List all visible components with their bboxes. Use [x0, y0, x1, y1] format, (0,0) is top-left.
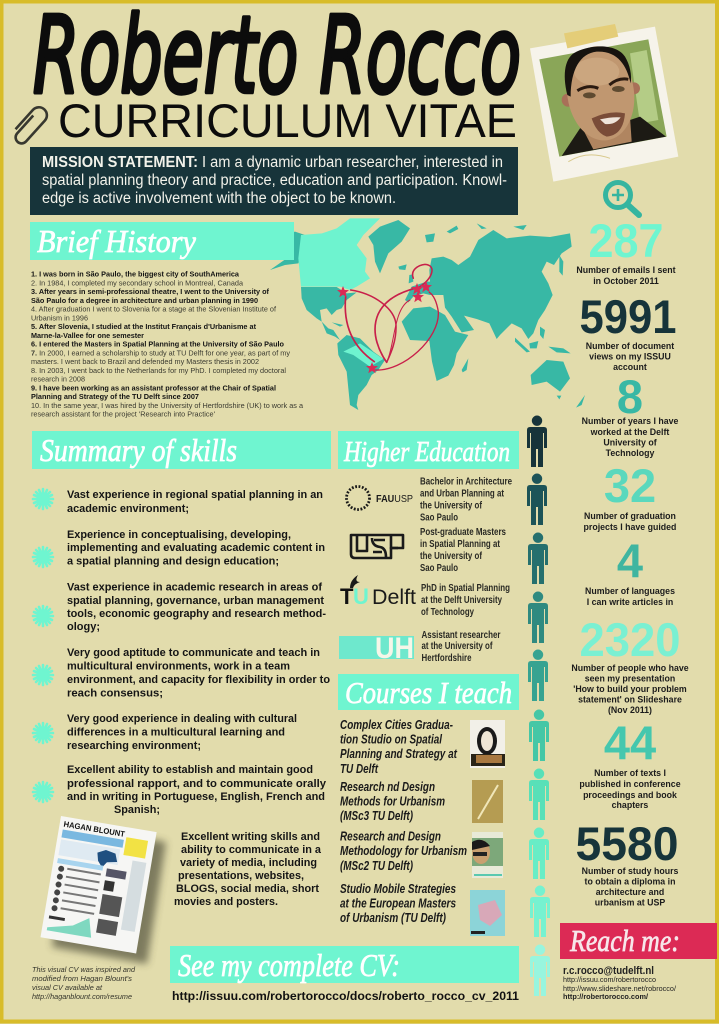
logo: TU Delft: T — [340, 584, 354, 609]
stat: 2320 views: statement' on Slideshare — [578, 694, 682, 704]
icon: paperclip — [10, 104, 50, 146]
writing skills text: movies and posters. — [174, 896, 278, 908]
course 2 — [340, 780, 445, 823]
credit note — [32, 965, 136, 1001]
skills list: Very good aptitude to communicate and teach in — [67, 647, 320, 659]
course 4: of Urbanism (TU Delft) — [340, 911, 446, 925]
stat: 5991 views: Number of document — [586, 341, 674, 351]
contact details: http://issuu.com/robertorocco — [563, 977, 656, 984]
brief history list: Marne-la-Vallee for one semester — [31, 331, 144, 340]
panel: brief history heading — [30, 222, 294, 260]
panel: higher education heading: Higher Education — [343, 436, 510, 468]
stat: 2320 views: (Nov 2011) — [608, 705, 652, 715]
logo: University of Hertfordshire — [339, 632, 414, 665]
subtitle: Curriculum Vitae: CURRICULUM VITAE — [58, 95, 517, 148]
course 3 thumbnail — [472, 832, 503, 878]
education: bachelor: the University of — [420, 500, 482, 512]
map: highlighted Canada and Brazil — [298, 218, 383, 367]
stat: 44 texts: published in conference — [579, 779, 681, 789]
mission statement panel: MISSION STATEMENT: I am a dynamic urban researcher, interested in — [42, 154, 503, 171]
stat: 4 languages — [585, 534, 675, 607]
course 4: at the European Masters — [340, 896, 456, 910]
stat: 4 languages: 4 — [617, 534, 643, 587]
writing skills text: presentations, websites, — [178, 870, 304, 882]
education: assistant researcher: Hertfordshire — [422, 652, 472, 664]
stat: 2320 views: 2320 — [580, 613, 680, 666]
logo: USP — [351, 535, 403, 558]
education: PhD — [421, 582, 510, 618]
brief history list: Planning and Strategy of the TU Delft since 2007 — [31, 392, 199, 401]
skills list: ology; — [67, 621, 100, 633]
skills list: tools, economic geography and research method- — [67, 608, 326, 620]
course 1: Complex Cities Gradua- — [340, 718, 453, 732]
panel: courses heading: Courses I teach — [345, 675, 512, 710]
stat: 5580 hours: to obtain a diploma in — [585, 876, 675, 886]
stat: 5580 hours: Number of study hours — [582, 866, 678, 876]
skills list: academic environment; — [67, 503, 189, 515]
stat: 5991 views: account — [613, 362, 647, 372]
stat: 2320 views: seen my presentation — [585, 674, 675, 684]
brief history list: 5. After Slovenia, I studied at the Institut Français d'Urbanisme at — [31, 322, 256, 331]
course 3: Methodology for Urbanism — [340, 844, 467, 858]
course 4: Studio Mobile Strategies — [340, 882, 456, 896]
course 1 — [340, 718, 458, 776]
stat: 4 languages: Number of languages — [585, 586, 675, 596]
stat: 32 projects: 32 — [604, 459, 656, 512]
education: bachelor — [420, 476, 512, 524]
contact details — [563, 965, 676, 1001]
course 2: Research nd Design — [340, 780, 435, 794]
skills list: differences in a multicultural learning and — [67, 726, 285, 738]
education: PhD: of Technology — [421, 606, 474, 618]
skills list — [67, 489, 330, 816]
map: travel routes — [345, 264, 438, 370]
course 4 — [340, 882, 456, 925]
stat: 287 emails: Number of emails I sent — [576, 265, 676, 275]
skills list: Vast experience in academic research in areas of — [67, 582, 322, 594]
stat: 5991 views: 5991 — [580, 290, 676, 343]
stat: 44 texts: chapters — [612, 800, 648, 810]
brief history list: masters. I went back to Brazil and defended my Masters thesis in 2002 — [31, 357, 259, 366]
education: bachelor: Bachelor in Architecture — [420, 476, 512, 488]
brief history list: Urbanism in 1996 — [31, 313, 88, 322]
brief history list: 4. After graduation I went to Slovenia for a stage at the Slovenian Institute of — [31, 304, 277, 314]
education: masters: the University of — [420, 550, 482, 562]
writing skills text: ability to communicate in a — [181, 844, 322, 856]
credit note: visual CV available at — [32, 983, 103, 992]
stat: 5991 views: views on my ISSUU — [589, 352, 671, 362]
brief history list: 2. In 1984, I completed my secondary school in Montreal, Canada — [31, 278, 244, 287]
course 2 thumbnail — [472, 780, 503, 823]
brief history list — [31, 270, 304, 418]
icon: magnifier — [606, 182, 639, 215]
skills list: professional rapport, and to communicate orally — [67, 778, 327, 790]
stat: 8 years: worked at the Delft — [590, 427, 669, 437]
brief history list: research assistant for the project 'Research into Practice' — [31, 410, 216, 418]
world map — [270, 218, 585, 410]
mission statement panel — [30, 147, 518, 215]
education: masters: Post-graduate Masters — [420, 526, 506, 538]
map: city stars — [337, 281, 432, 373]
stat: 287 emails — [576, 214, 676, 286]
mission statement panel: edge is active involvement with the object to be known. — [42, 190, 396, 207]
logo: TU Delft — [340, 575, 416, 609]
skills list: implementing and evaluating academic content in — [67, 542, 325, 554]
education: masters — [420, 526, 506, 574]
writing skills text: Excellent writing skills and — [181, 831, 320, 843]
brief history list: 1. I was born in São Paulo, the biggest city of SouthAmerica — [31, 270, 240, 278]
credit note: modified from Hagan Blount's — [32, 974, 132, 983]
map: land masses — [270, 220, 585, 410]
course 1: tion Studio on Spatial — [340, 732, 442, 746]
logo: FAU USP: FAUUSP — [376, 494, 413, 505]
panel: see my complete CV: See my complete CV: — [178, 947, 400, 983]
stat: 2320 views: 'How to build your problem — [573, 684, 687, 694]
stat: 8 years: University of — [603, 438, 657, 448]
poster thumbnail: Hagan Blount visual CV: HAGAN BLOUNT — [63, 820, 126, 839]
credit note: http://haganblount.com/resume — [32, 992, 132, 1001]
stat: 5580 hours: urbanism at USP — [595, 898, 665, 908]
brief history list: 9. I have been working as an assistant professor at the Chair of Spatial — [31, 383, 276, 392]
skills list: environment, and capacity for flexibility in order to — [67, 674, 330, 686]
stat: 44 texts: Number of texts I — [594, 768, 666, 778]
course 1: Planning and Strategy at — [340, 747, 458, 761]
education: assistant researcher: at the University of — [422, 640, 493, 652]
skills list: researching environment; — [67, 740, 201, 752]
course 2: Methods for Urbanism — [340, 794, 445, 808]
skills list: spatial planning, governance, urban management — [67, 595, 324, 607]
stat: 44 texts: proceedings and book — [583, 790, 677, 800]
logo: University of Hertfordshire: UH — [375, 632, 414, 665]
brief history list: 7. In 2000, I earned a scholarship to study at TU Delft for one year, as part of my — [31, 348, 290, 357]
stat: 287 emails: in October 2011 — [593, 276, 659, 286]
stat: 44 texts: 44 — [604, 716, 656, 769]
education: masters: Sao Paulo — [420, 562, 458, 574]
stat: 2320 views — [571, 613, 689, 715]
panel: reach me: Reach me: — [569, 923, 680, 958]
poster thumbnail: Hagan Blount visual CV — [40, 816, 166, 964]
contact details: http://www.slideshare.net/robrocco/ — [563, 986, 676, 993]
skills list: a spatial planning and design education; — [67, 556, 279, 568]
panel: summary of skills heading: Summary of skills — [40, 432, 237, 468]
brief history list: 6. I entered the Masters in Spatial Planning at the University of São Paulo — [31, 340, 284, 348]
skills list: Experience in conceptualising, developing, — [67, 529, 291, 541]
polaroid photo — [530, 24, 678, 182]
brief history list: 8. In 2003, I went back to the Netherlands for my PhD. I completed my doctoral — [31, 366, 286, 375]
education: assistant researcher — [422, 629, 500, 664]
stat: 5580 hours: architecture and — [596, 887, 664, 897]
stat: 5580 hours — [576, 817, 678, 908]
course 1 thumbnail — [470, 720, 505, 768]
people pictogram column — [527, 416, 550, 996]
logo: FAU USP — [346, 486, 413, 510]
stat: 32 projects: projects I have guided — [584, 522, 676, 532]
skills list: Vast experience in regional spatial planning in an — [67, 489, 323, 501]
education: PhD: at the Delft University — [421, 594, 502, 606]
education: bachelor: Sao Paulo — [420, 512, 458, 524]
stat: 2320 views: Number of people who have — [571, 663, 689, 673]
contact details: http://robertorocco.com/ — [563, 994, 648, 1001]
course 1: TU Delft — [340, 762, 379, 776]
credit note: This visual CV was inspired and — [32, 965, 136, 974]
brief history list: 3. After years in semi-professional theatre, I went to the University of — [31, 287, 269, 296]
education: masters: in Spatial Planning at — [420, 538, 500, 550]
stat: 32 projects — [584, 459, 676, 532]
stat: 8 years: 8 — [617, 370, 643, 423]
skills list: Very good experience in dealing with cultural — [67, 713, 297, 725]
skills list: multicultural environments, work in a team — [67, 660, 290, 672]
skill bullets — [33, 489, 53, 802]
writing skills text: variety of media, including — [180, 857, 317, 869]
logo: TU Delft: U — [353, 584, 369, 609]
stat: 8 years: Technology — [606, 448, 654, 458]
stat: 5991 views — [580, 290, 676, 372]
writing skills text: BLOGS, social media, short — [176, 883, 319, 895]
writing skills text — [174, 831, 322, 908]
course 3: (MSc2 TU Delft) — [340, 859, 413, 873]
education: PhD: PhD in Spatial Planning — [421, 582, 510, 594]
mission statement panel: spatial planning theory and practice, education and participation. Knowl- — [42, 172, 507, 189]
panel: brief history heading: Brief History — [37, 223, 197, 259]
CV link: http://issuu.com/robertorocco/docs/roberto_rocco_cv_2011 — [172, 989, 519, 1003]
education: assistant researcher: Assistant researcher — [422, 629, 500, 641]
brief history list: 10. In the same year, I was hired by the University of Hertfordshire (UK) to work as a — [31, 401, 304, 410]
skills list: and in writing in Portuguese, English, French and — [67, 791, 325, 803]
stat: 8 years: Number of years I have — [582, 416, 679, 426]
skills list: Spanish; — [114, 804, 160, 816]
contact details: r.c.rocco@tudelft.nl — [563, 965, 654, 977]
brief history list: research in 2008 — [31, 374, 85, 384]
course 2: (MSc3 TU Delft) — [340, 809, 413, 823]
course 3: Research and Design — [340, 830, 441, 844]
stat: 44 texts — [579, 716, 681, 810]
skills list: Excellent ability to establish and maintain good — [67, 764, 313, 776]
stat: 5580 hours: 5580 — [576, 817, 678, 870]
stat: 32 projects: Number of graduation — [584, 511, 676, 521]
stat: 287 emails: 287 — [588, 214, 664, 267]
logo: TU Delft: Delft — [372, 586, 416, 609]
education: bachelor: and Urban Planning at — [420, 488, 504, 500]
stat: 8 years — [582, 370, 679, 458]
course 3 — [340, 830, 467, 873]
brief history list: São Paulo for a degree in architecture and urban planning in 1990 — [31, 296, 258, 305]
course 4 thumbnail — [470, 890, 505, 936]
skills list: reach consensus; — [67, 688, 163, 700]
stat: 4 languages: I can write articles in — [587, 597, 673, 607]
